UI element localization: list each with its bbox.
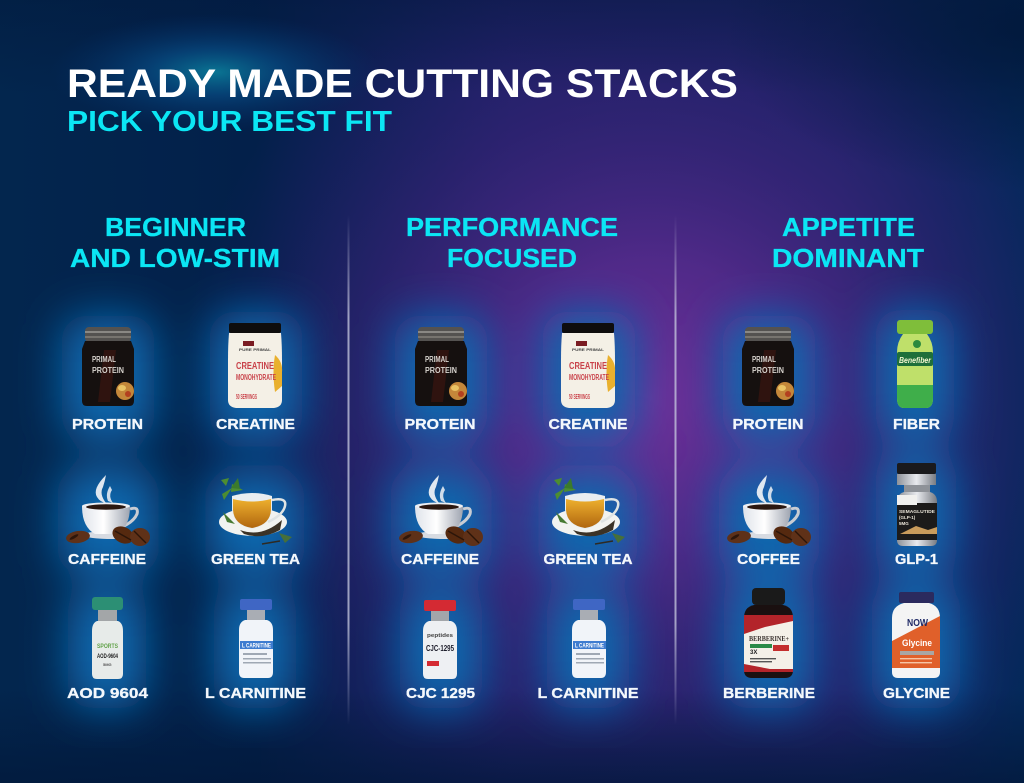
- icon: creatine tub: MONOHYDRATE: [236, 373, 276, 382]
- icon: aod vial: [92, 597, 123, 679]
- icon: glycine bottle: [892, 592, 940, 678]
- icon: tea cup: [219, 478, 292, 544]
- icon: aod vial: SPORTS: [97, 644, 118, 650]
- item: aod 9604: [67, 597, 149, 702]
- item: l carnitine: [205, 599, 306, 702]
- label: caffeine: CAFFEINE: [68, 551, 146, 568]
- icon: creatine tub: CREATINE: [236, 361, 274, 372]
- item: berberine: [723, 588, 815, 702]
- item: glycine: [883, 592, 950, 702]
- item: creatine: [216, 323, 295, 433]
- heading: appetite dominant: APPETITE: [782, 212, 915, 242]
- label: caffeine: CAFFEINE: [401, 551, 479, 568]
- icon: creatine tub: 50 SERVINGS: [569, 394, 590, 401]
- icon: creatine tub: 50 SERVINGS: [236, 394, 257, 401]
- panel: performance focused: [398, 212, 638, 702]
- icon: aod vial: 5MG: [103, 662, 112, 667]
- item: protein: [404, 327, 476, 433]
- icon: protein jar: [742, 327, 794, 406]
- item: l carnitine: [538, 599, 638, 702]
- icon: berberine bottle: [744, 588, 793, 678]
- icon: glycine bottle: NOW: [907, 618, 928, 629]
- label: green tea: GREEN TEA: [544, 551, 633, 568]
- icon: berberine bottle: BERBERINE+: [749, 634, 789, 643]
- icon: creatine tub: PURE PRIMAL: [572, 347, 605, 352]
- icon: protein jar: PRIMAL: [752, 355, 776, 364]
- item: green tea: [211, 478, 300, 568]
- icon: protein jar: PRIMAL: [425, 355, 449, 364]
- title: READY MADE CUTTING STACKS: [67, 62, 738, 106]
- icon: glp-1 vial: 5MG: [899, 521, 909, 526]
- item: green tea: [544, 478, 633, 568]
- label: coffee: COFFEE: [737, 551, 800, 568]
- icon: glp-1 vial: (GLP-1): [899, 515, 916, 520]
- panel: beginner and low-stim: [65, 212, 306, 702]
- label: fiber: FIBER: [893, 416, 940, 433]
- item: protein: [72, 327, 143, 433]
- icon: creatine tub: CREATINE: [569, 361, 607, 372]
- icon: protein jar: PROTEIN: [752, 366, 784, 375]
- icon: creatine tub: [228, 323, 282, 408]
- icon: fiber bottle: Benefiber: [899, 356, 932, 365]
- icon: glp-1 vial: SEMAGLUTIDE: [899, 509, 935, 514]
- icon: glycine bottle: Glycine: [902, 638, 932, 648]
- item: coffee: [726, 475, 811, 568]
- heading: appetite dominant: [772, 212, 924, 273]
- icon: cjc vial: peptides: [427, 633, 453, 639]
- label: cjc 1295: CJC 1295: [406, 685, 475, 702]
- heading: beginner and low-stim: [70, 212, 280, 273]
- icon: coffee cup: [726, 475, 811, 547]
- label: green tea: GREEN TEA: [211, 551, 300, 568]
- icon: glp-1 vial: [897, 463, 937, 546]
- heading: performance focused: PERFORMANCE: [406, 212, 618, 242]
- label: creatine: CREATINE: [216, 416, 295, 433]
- icon: creatine tub: MONOHYDRATE: [569, 373, 609, 382]
- panel: appetite dominant: [723, 212, 950, 702]
- icon: creatine tub: [561, 323, 615, 408]
- label: glycine: GLYCINE: [883, 685, 950, 702]
- label: aod 9604: AOD 9604: [67, 685, 149, 702]
- heading: beginner and low-stim: BEGINNER: [105, 212, 246, 242]
- icon: coffee cup: [398, 475, 483, 547]
- label: protein: PROTEIN: [404, 416, 476, 433]
- label: l carnitine: L CARNITINE: [538, 685, 638, 702]
- label: glp-1: GLP-1: [895, 551, 938, 568]
- item: cjc 1295: [406, 600, 475, 702]
- icon: protein jar: [82, 327, 134, 406]
- label: protein: PROTEIN: [72, 416, 143, 433]
- item: glp-1: [895, 463, 938, 568]
- icon: l carnitine vial: L CARNITINE: [242, 644, 271, 650]
- item: fiber: [893, 320, 940, 433]
- heading: performance focused: FOCUSED: [447, 243, 577, 273]
- icon: protein jar: PROTEIN: [425, 366, 457, 375]
- icon: tea cup: [552, 478, 625, 544]
- heading: beginner and low-stim: AND LOW-STIM: [70, 243, 280, 273]
- heading: appetite dominant: DOMINANT: [772, 243, 924, 273]
- icon: berberine bottle: 3X: [750, 650, 757, 656]
- label: protein: PROTEIN: [732, 416, 804, 433]
- icon: protein jar: PROTEIN: [92, 366, 124, 375]
- label: l carnitine: L CARNITINE: [205, 685, 306, 702]
- label: berberine: BERBERINE: [723, 685, 815, 702]
- item: caffeine: [398, 475, 483, 568]
- icon: cjc vial: [423, 600, 457, 679]
- icon: aod vial: AOD-9604: [97, 653, 118, 660]
- item: creatine: [548, 323, 628, 433]
- icon: protein jar: PRIMAL: [92, 355, 116, 364]
- icon: coffee cup: [65, 475, 150, 547]
- item: caffeine: [65, 475, 150, 568]
- icon: cjc vial: CJC-1295: [426, 644, 454, 653]
- icon: protein jar: [415, 327, 467, 406]
- heading: performance focused: [406, 212, 618, 273]
- label: creatine: CREATINE: [548, 416, 628, 433]
- icon: l carnitine vial: L CARNITINE: [575, 644, 604, 650]
- item: protein: [732, 327, 804, 433]
- icon: creatine tub: PURE PRIMAL: [239, 347, 272, 352]
- subtitle: PICK YOUR BEST FIT: [67, 106, 392, 138]
